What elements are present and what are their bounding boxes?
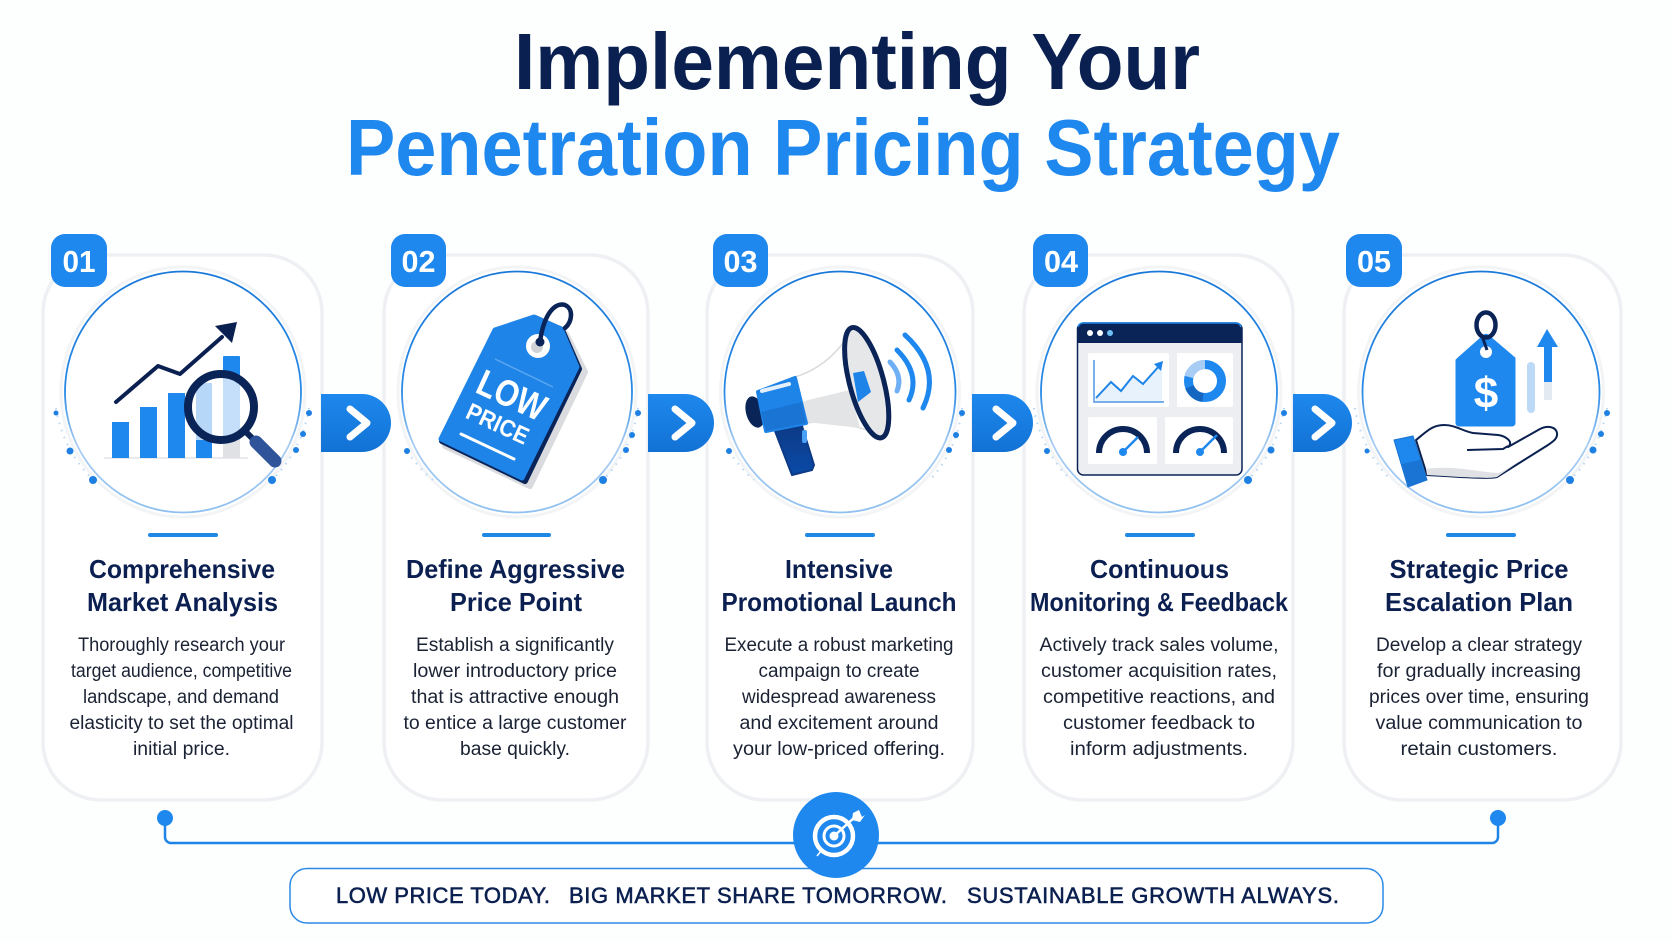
text: step 2: base quickly. xyxy=(460,739,570,760)
icon ring: step 2 xyxy=(398,267,641,517)
icon ring: step 3 xyxy=(720,267,965,517)
icon ring: step 5 xyxy=(1355,267,1610,517)
badge 01 xyxy=(51,234,107,287)
heading: step 4: Continuous xyxy=(1090,554,1229,584)
icon: megaphone xyxy=(742,323,929,475)
text: step 3 xyxy=(724,635,954,760)
badge 03: 03 xyxy=(724,244,758,279)
icon: hand holding price tag xyxy=(1394,312,1558,487)
text: step 5: Develop a clear strategy xyxy=(1376,635,1582,656)
bottom connector line xyxy=(157,810,1506,843)
text: step 3: your low-priced offering. xyxy=(733,739,945,760)
badge 05: 05 xyxy=(1357,244,1391,279)
tagline pill: SUSTAINABLE GROWTH ALWAYS. xyxy=(967,883,1339,908)
icon: target badge xyxy=(793,792,879,878)
heading: step 4 xyxy=(1030,554,1288,617)
badge 02 xyxy=(391,234,446,287)
text: step 1: target audience, competitive xyxy=(71,661,292,682)
text: step 4: customer feedback to xyxy=(1063,713,1255,734)
text: step 5 xyxy=(1369,635,1589,760)
arrow: step 2 to 3 xyxy=(648,394,714,452)
heading: step 2: Define Aggressive xyxy=(406,554,625,584)
badge 04: 04 xyxy=(1044,244,1079,279)
text: step 4: Actively track sales volume, xyxy=(1040,635,1278,656)
heading: step 5 xyxy=(1385,554,1573,617)
text: step 2 xyxy=(404,635,627,760)
panel: step 4 monitoring xyxy=(1024,234,1293,800)
icon: dashboard window xyxy=(1077,323,1242,475)
tagline pill xyxy=(290,868,1383,923)
heading: step 2 xyxy=(406,554,625,617)
icon: low price tag: PRICE xyxy=(462,398,533,450)
icon ring: step 1 xyxy=(54,267,312,517)
heading: step 5: Strategic Price xyxy=(1390,554,1568,584)
text: step 2: that is attractive enough xyxy=(411,687,619,708)
tagline pill: BIG MARKET SHARE TOMORROW. xyxy=(569,883,947,908)
badge 03 xyxy=(713,234,768,287)
text: step 3: widespread awareness xyxy=(741,687,936,708)
panel: step 1 market analysis xyxy=(43,234,322,800)
tagline pill: LOW PRICE TODAY. xyxy=(336,883,550,908)
text: step 4: competitive reactions, and xyxy=(1043,687,1275,708)
heading: step 3: Promotional Launch xyxy=(722,587,956,617)
panel: step 2 price point xyxy=(384,234,648,800)
heading: step 3: Intensive xyxy=(785,554,893,584)
text: step 4 xyxy=(1040,635,1278,760)
heading: step 4: Monitoring & Feedback xyxy=(1030,587,1288,617)
text: step 3: campaign to create xyxy=(758,661,920,682)
text: step 1: elasticity to set the optimal xyxy=(70,713,294,734)
text: step 4: customer acquisition rates, xyxy=(1041,661,1277,682)
heading: step 1 xyxy=(87,554,278,617)
panel: step 5 escalation plan xyxy=(1344,234,1621,800)
heading: step 1: Comprehensive xyxy=(89,554,275,584)
icon: low price tag: LOW xyxy=(471,362,553,429)
text: step 5: for gradually increasing xyxy=(1377,661,1581,682)
icon: bar chart with magnifier xyxy=(104,322,275,461)
text: step 5: prices over time, ensuring xyxy=(1369,687,1589,708)
text: step 2: to entice a large customer xyxy=(404,713,627,734)
title: Penetration Pricing Strategy xyxy=(346,103,1340,192)
text: step 2: lower introductory price xyxy=(413,661,617,682)
text: step 1: landscape, and demand xyxy=(83,687,279,708)
text: step 3: Execute a robust marketing xyxy=(724,635,954,656)
panel: step 3 promotional launch xyxy=(707,234,973,800)
text: step 5: value communication to xyxy=(1376,713,1582,734)
heading: step 5: Escalation Plan xyxy=(1385,587,1573,617)
icon: low price tag xyxy=(441,304,585,486)
badge 01: 01 xyxy=(62,244,96,279)
arrow: step 3 to 4 xyxy=(972,394,1033,452)
title: Implementing Your xyxy=(514,17,1200,106)
text: step 1: initial price. xyxy=(133,739,230,760)
text: step 5: retain customers. xyxy=(1400,739,1558,760)
text: step 3: and excitement around xyxy=(740,713,938,734)
badge 04 xyxy=(1033,234,1088,287)
arrow: step 4 to 5 xyxy=(1293,394,1352,452)
heading: step 3 xyxy=(722,554,956,617)
badge 05 xyxy=(1346,234,1402,287)
badge 02: 02 xyxy=(402,244,436,279)
icon: hand holding price tag: $ xyxy=(1474,369,1498,418)
heading: step 2: Price Point xyxy=(450,587,582,617)
icon ring: step 4 xyxy=(1034,267,1287,517)
arrow: step 1 to 2 xyxy=(321,394,391,452)
text: step 2: Establish a significantly xyxy=(416,635,614,656)
text: step 1: Thoroughly research your xyxy=(78,635,286,656)
text: step 4: inform adjustments. xyxy=(1070,739,1248,760)
text: step 1 xyxy=(70,635,294,760)
heading: step 1: Market Analysis xyxy=(87,587,278,617)
title xyxy=(346,17,1340,192)
